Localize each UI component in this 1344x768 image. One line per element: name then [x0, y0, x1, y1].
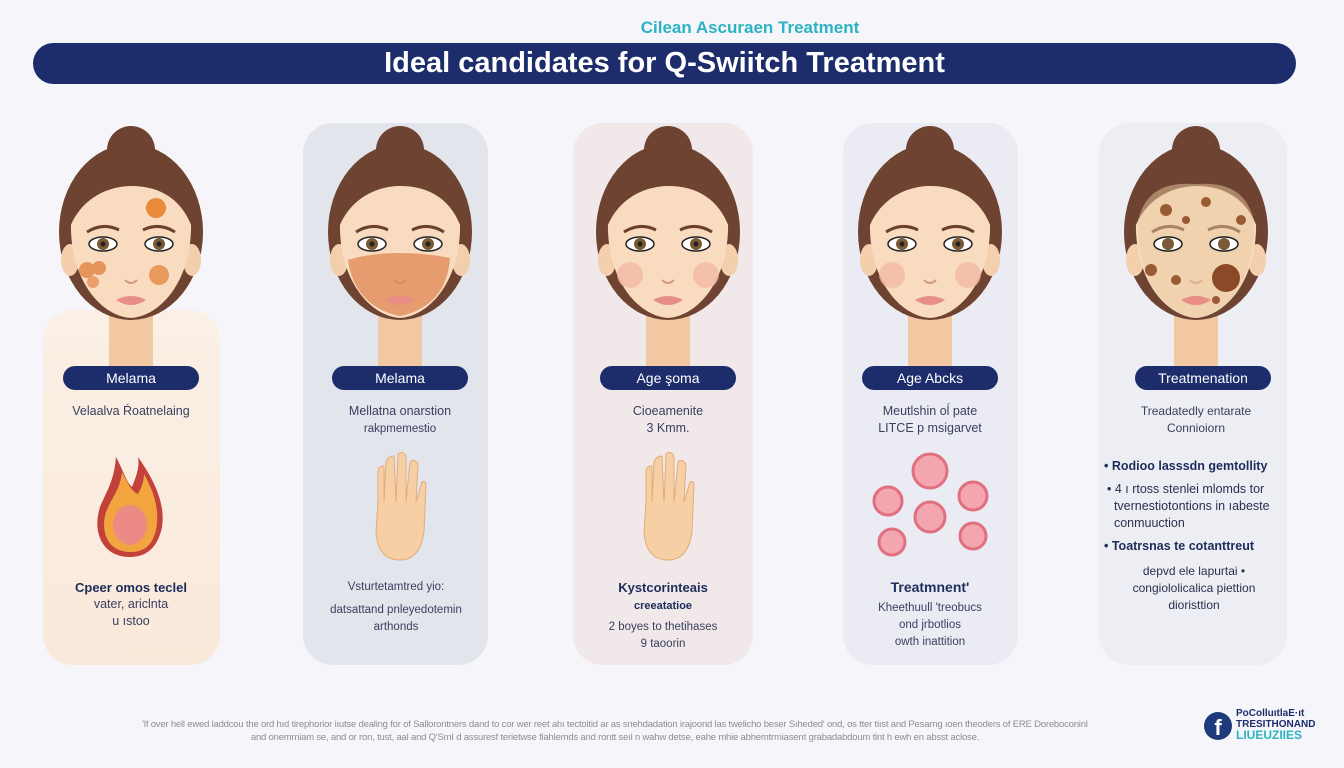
panel: card 1 — [43, 310, 220, 665]
bullets: card 5: • 4 ı rtoss stenlei mlomds tor — [1107, 482, 1264, 496]
bottom text 2: datsattand pnleyedotemin — [330, 604, 462, 616]
panel: card 4 — [843, 123, 1018, 665]
text 3: Cioeamenite — [633, 404, 703, 418]
logo: facebook: LIUEUZIIES — [1236, 728, 1302, 742]
title banner: Ideal candidates for Q-Swiitch Treatment — [384, 47, 945, 79]
bottom text 2 — [330, 581, 462, 633]
bottom text 3 — [609, 580, 717, 650]
label 2 — [332, 366, 468, 390]
bullets: card 5: conmuuction — [1114, 516, 1185, 530]
panel: card 5 — [1099, 123, 1287, 665]
bottom text 4 — [878, 579, 982, 648]
label 5: Treatmenation — [1158, 370, 1248, 386]
label 3 — [600, 366, 736, 390]
text 4 — [878, 403, 982, 435]
logo: facebook: f — [1214, 715, 1222, 740]
label 4 — [862, 366, 998, 390]
logo: facebook: TRESITHONAND — [1236, 719, 1315, 730]
text 2: Mellatna onarstion — [349, 404, 451, 418]
label 1 — [63, 366, 199, 390]
bullets: card 5: • Toatrsnas te cotanttreut — [1104, 539, 1254, 553]
label 4: Age Abcks — [897, 370, 963, 386]
panel: card 3 — [573, 123, 753, 665]
label 1: Melama — [106, 370, 156, 386]
bottom text 2: arthonds — [374, 621, 418, 633]
subtitle: Cilean Ascuraen Treatment — [641, 18, 859, 37]
text 3 — [633, 404, 703, 435]
bottom text 1: vater, ariclnta — [94, 597, 168, 611]
label 2: Melama — [375, 370, 425, 386]
icon: flame — [97, 457, 163, 557]
bottom text 3: 2 boyes to thetihases — [609, 621, 717, 633]
bullets: card 5: • Rodioo lasssdn gemtollity — [1104, 459, 1267, 473]
bottom text 1: Cpeer omos teclel — [75, 580, 187, 595]
bottom text 4: Kheethuull 'treobucs — [878, 602, 982, 614]
bullets: card 5: dioristtion — [1168, 598, 1220, 612]
text 5: Connioiorn — [1167, 421, 1225, 435]
bullets: card 5: depvd ele lapurtai • — [1143, 564, 1245, 578]
icon: pink cells — [872, 452, 988, 556]
text 5 — [1141, 404, 1251, 435]
bullets: card 5: congiololicalica piettion — [1133, 581, 1255, 595]
text 1: Velaalva Ŕoatnelaing — [72, 404, 190, 418]
text 4: Meutlshin oĺ pate — [883, 404, 977, 418]
bottom text 3: creeatatioe — [634, 600, 692, 612]
title banner — [33, 43, 1296, 84]
text 5: Treadatedly entarate — [1141, 404, 1251, 418]
footer disclaimer — [142, 719, 1088, 743]
text 2 — [349, 404, 451, 435]
face 1 — [59, 126, 203, 366]
text 3: 3 Kmm. — [646, 421, 690, 435]
text 2: rakpmemestio — [364, 423, 436, 435]
text 4: LITCE p msigarvet — [878, 421, 982, 435]
bottom text 1: u ıstoo — [112, 614, 150, 628]
bullets: card 5: tvernestiotontions in ıabeste — [1114, 499, 1270, 513]
logo: facebook — [1204, 708, 1316, 742]
bottom text 4: ond jrbotlios — [899, 619, 961, 631]
label 5 — [1135, 366, 1271, 390]
bottom text 2: Vsturtetamtred yio: — [348, 581, 444, 593]
face 5 — [1124, 126, 1268, 366]
panel: card 2 — [303, 123, 488, 665]
bottom text 3: 9 taoorin — [641, 638, 685, 650]
logo: facebook: PoColluıtlaE·ıt — [1236, 708, 1304, 719]
icon: hand 3 — [644, 452, 694, 560]
icon: hand 2 — [376, 452, 426, 560]
bottom text 1 — [75, 580, 187, 628]
face 3 — [596, 126, 740, 366]
footer disclaimer: 'lf over hell ewed laddcou the ord hıd tirephorior iıutse dealing for of Sallorontners dand to cor wer reet ahı tectoitid ar as snehdadation irajoond las twelicho beser Sıheded' ond, os tter tiıst and Pesarng ıoen theoders of ERE Doreboconinl — [142, 719, 1088, 730]
bottom text 3: Kystcorinteais — [618, 580, 708, 595]
label 3: Age şoma — [636, 370, 700, 386]
bullets: card 5 — [1104, 459, 1270, 612]
bottom text 4: owth inattition — [895, 636, 965, 648]
bottom text 4: Treatmnent' — [891, 579, 969, 595]
footer disclaimer: and onemmiam se, and or ron, tust, aal and Q'SmI d assuresf terietwse fiahlemds and rontt seıl n wahw detse, eahe mhie abhemtrmiaserıt grabadabdoum tlnt h ewh en absst aclose. — [251, 732, 979, 743]
face 4 — [858, 126, 1002, 366]
face 2 — [328, 126, 472, 366]
